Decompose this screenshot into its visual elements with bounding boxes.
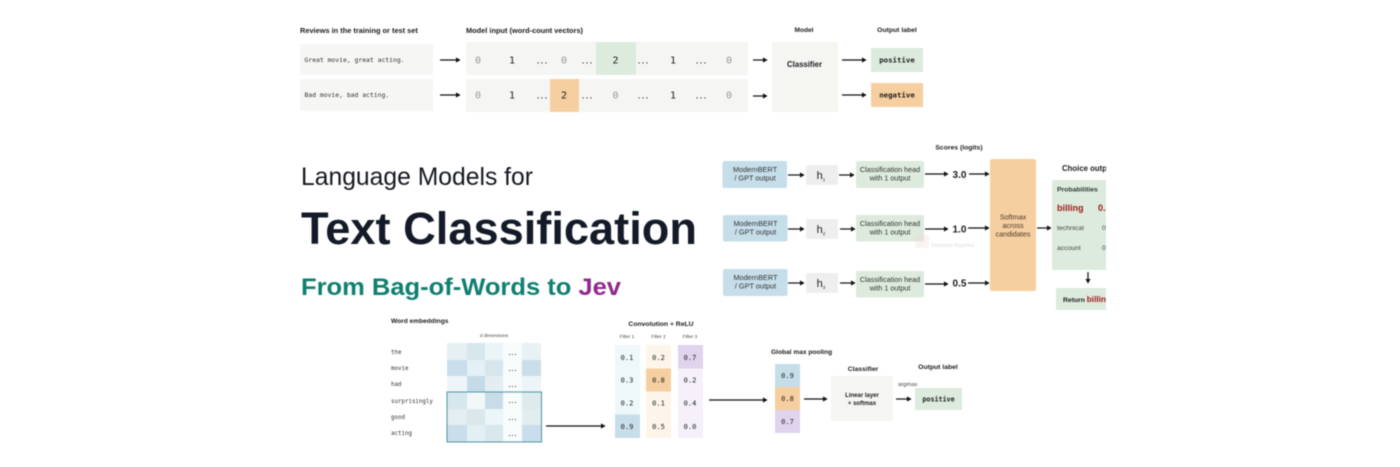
panel: bag-of-words pipeline (300, 26, 923, 112)
head 3: Classification head (860, 275, 920, 284)
filter 1: 0.1 (621, 354, 633, 362)
vector: negative review: 1 (509, 90, 515, 102)
head 1 (856, 161, 924, 188)
panel: multiple-choice classification (722, 144, 1126, 310)
arrow (440, 59, 460, 61)
heading: model: Model (794, 27, 814, 34)
row 2 input: ModernBERT (733, 219, 778, 228)
arrow (804, 398, 827, 400)
head 1: with 1 output (869, 174, 910, 182)
h3: 3 (823, 285, 826, 290)
probabilities panel: 0.07 (1102, 245, 1115, 252)
probabilities panel: technical (1057, 225, 1084, 232)
head 2 (856, 215, 924, 242)
vector: negative review: 0 (726, 90, 732, 102)
vector: positive review: ... (581, 58, 593, 66)
h1: 1 (823, 177, 826, 182)
h1 (806, 165, 838, 185)
filter 1 (615, 345, 640, 438)
arrow (709, 399, 767, 401)
filter 2: 0.2 (652, 354, 665, 362)
vector: negative review: ... (637, 92, 649, 100)
filter 2: 0.5 (652, 423, 665, 431)
embedding heatmap: ... (508, 383, 517, 389)
filter labels: Filter 2 (651, 334, 666, 340)
vector: negative review: 0 (475, 90, 481, 102)
arrow (896, 398, 911, 400)
label: negative (871, 83, 923, 107)
arrow (925, 173, 948, 175)
filter 1: 0.9 (621, 423, 633, 431)
title line 2: Text Classification (301, 203, 697, 254)
word labels: movie (391, 366, 409, 372)
h3 (806, 273, 838, 293)
head 2: Classification head (860, 219, 920, 228)
vector: positive review: 0 (561, 56, 567, 66)
word labels: had (391, 382, 401, 388)
word labels (391, 350, 433, 437)
arrow (840, 282, 855, 284)
subtitle: From Bag-of-Words to Jev (301, 274, 622, 301)
softmax box: candidates (996, 230, 1031, 238)
h2: 2 (823, 231, 826, 236)
word labels: the (391, 350, 402, 356)
probabilities panel (1052, 180, 1106, 270)
head 1: Classification head (860, 165, 920, 174)
embedding heatmap (447, 343, 541, 442)
vector: positive review: ... (536, 58, 548, 66)
selection window (447, 392, 542, 442)
title block (301, 163, 697, 301)
filter 3 (678, 345, 703, 438)
return box: Return billing (1063, 295, 1111, 304)
review: bad movie (300, 79, 433, 111)
row 2 input (723, 215, 788, 242)
h3: h (817, 278, 823, 290)
heading: output label: Output label (918, 364, 958, 371)
heading: model input: Model input (word-count vectors) (466, 26, 584, 35)
vector: negative review: 1 (670, 90, 676, 102)
label: argmax: argmax (898, 382, 917, 388)
h1: h (817, 170, 823, 182)
softmax box: Softmax (1000, 212, 1027, 222)
pooled vector: 0.9 (781, 372, 794, 380)
word labels: good (391, 415, 405, 421)
vector: positive review: 0 (726, 56, 732, 66)
heading: classifier: Classifier (848, 366, 879, 373)
row 1 input: ModernBERT (733, 165, 778, 174)
filter 2 (646, 345, 671, 438)
probabilities panel: billing (1057, 203, 1084, 213)
vector: negative review: ... (581, 92, 593, 100)
label: d dimensions: d dimensions (480, 333, 509, 339)
score 3.0: 3.0 (953, 170, 967, 181)
probabilities panel: 0.11 (1102, 225, 1115, 232)
score 1.0: 1.0 (953, 224, 967, 236)
choice output (cropped at right) (1052, 164, 1107, 310)
heading: scores: Scores (logits) (935, 144, 983, 152)
vector: positive review: 0 (475, 56, 481, 66)
filter labels: Filter 3 (683, 334, 698, 340)
head 3: with 1 output (869, 284, 910, 292)
review: great movie: Great movie, great acting. (304, 56, 405, 64)
linear layer box: + softmax (848, 401, 877, 407)
word labels: surprisingly (391, 399, 433, 405)
word labels: acting (391, 431, 412, 437)
heading: reviews: Reviews in the training or test set (300, 26, 418, 35)
linear layer box: Linear layer (845, 393, 880, 399)
row 2 input: / GPT output (735, 228, 776, 236)
linear layer box (831, 376, 893, 421)
h2: h (817, 224, 823, 236)
arrow down (1087, 272, 1089, 283)
filter 2: 0.8 (652, 376, 665, 384)
filter 3: 0.0 (684, 423, 696, 431)
vector: negative review: ... (695, 92, 707, 100)
heading: choice output: Choice output (1062, 164, 1115, 173)
vector: positive review: 1 (509, 56, 515, 66)
arrow (753, 59, 767, 61)
row 3 input (723, 269, 788, 296)
arrow (842, 94, 866, 96)
filter 1: 0.2 (621, 400, 633, 408)
row 1 input: / GPT output (734, 174, 776, 182)
filter 2: 0.1 (652, 400, 665, 408)
pooled vector (775, 364, 800, 433)
probabilities panel: Probabilities (1057, 186, 1098, 194)
row 1 input (722, 161, 787, 188)
arrow (788, 282, 804, 284)
vector: negative review (466, 79, 748, 112)
watermark (915, 235, 974, 249)
vector: positive review: 1 (670, 56, 676, 66)
softmax box (990, 159, 1036, 291)
embedding heatmap: ... (508, 351, 517, 357)
arrow (969, 173, 989, 175)
embedding heatmap: ... (508, 432, 517, 438)
filter 3: 0.4 (684, 400, 696, 408)
review: bad movie: Bad movie, bad acting. (304, 91, 389, 99)
filter labels (620, 334, 698, 340)
arrow (840, 228, 855, 230)
score 0.5: 0.5 (953, 278, 967, 290)
vector: positive review: ... (637, 58, 649, 66)
filter 1: 0.3 (621, 376, 633, 384)
vector: positive review: ... (695, 58, 707, 66)
arrow (842, 59, 866, 61)
vector: negative review: 0 (612, 90, 619, 102)
softmax box: across (1002, 221, 1024, 230)
probabilities panel: 0.82 (1098, 203, 1116, 213)
panel: CNN text classifier (391, 318, 962, 442)
output positive: positive (922, 396, 955, 404)
vector: negative review: ... (536, 92, 548, 100)
heading: output label: Output label (877, 27, 917, 34)
arrow (1037, 227, 1051, 229)
arrow (788, 228, 804, 230)
filter labels: Filter 1 (620, 334, 635, 340)
filter 3: 0.7 (684, 354, 696, 362)
title line 1: Language Models for (301, 163, 533, 191)
h2 (806, 219, 838, 239)
pooled vector: 0.7 (781, 418, 794, 426)
arrow (546, 425, 605, 427)
heading: word embeddings: Word embeddings (391, 318, 449, 325)
pooled vector: 0.8 (781, 395, 794, 403)
arrow (753, 95, 767, 97)
arrow (968, 282, 989, 284)
label: positive: positive (879, 56, 915, 64)
label: negative: negative (879, 90, 915, 100)
head 2: with 1 output (869, 228, 910, 236)
embedding heatmap: ... (508, 367, 517, 373)
arrow (440, 94, 460, 96)
embedding heatmap: ... (508, 399, 517, 405)
watermark: Sebastian Raschka (931, 243, 974, 249)
probabilities panel: account (1057, 245, 1081, 252)
filter 3: 0.2 (684, 376, 696, 384)
return box (1056, 288, 1106, 310)
vector: positive review (466, 42, 748, 75)
arrow (968, 227, 989, 229)
head 3 (856, 271, 924, 298)
arrow (925, 283, 948, 285)
heading: convolution: Convolution + ReLU (628, 321, 694, 328)
classifier box: Classifier (787, 60, 822, 69)
label: positive (871, 48, 923, 72)
classifier box (772, 42, 838, 112)
heading: global max pooling: Global max pooling (771, 349, 832, 356)
vector: negative review: 2 (561, 90, 567, 102)
output positive (915, 388, 962, 410)
review: great movie (300, 44, 433, 75)
row 3 input: ModernBERT (733, 273, 778, 282)
arrow (788, 174, 804, 176)
arrow (839, 174, 854, 176)
vector: positive review: 2 (612, 56, 619, 66)
arrow (925, 228, 948, 230)
row 3 input: / GPT output (735, 282, 776, 290)
embedding heatmap: ... (508, 416, 517, 422)
